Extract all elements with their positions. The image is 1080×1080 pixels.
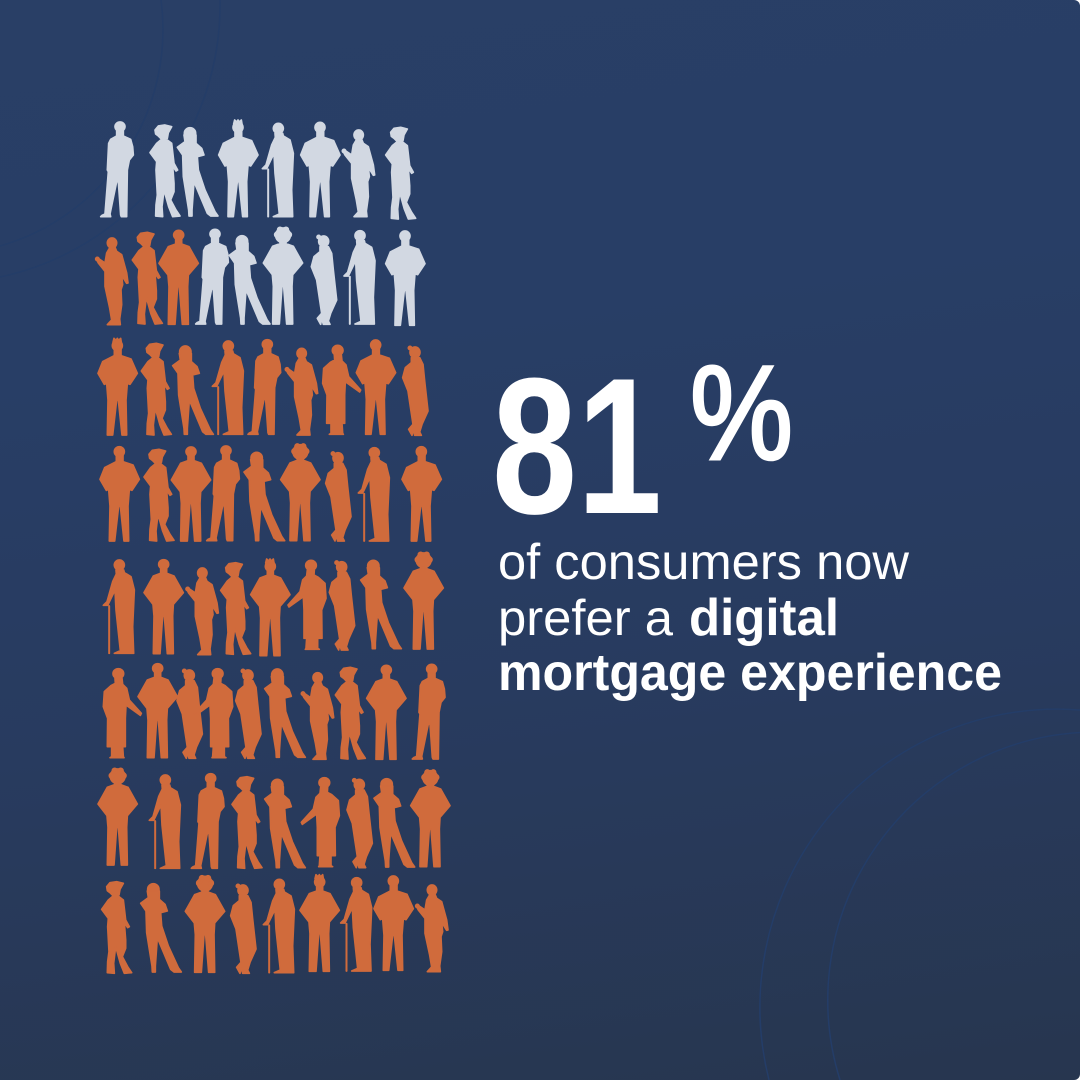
caption text: digital [689,589,839,647]
caption text: prefer a [498,590,673,646]
row 6: orange people [103,664,445,759]
statistic: 81 percent: % [690,339,793,488]
row 3: orange people [98,338,428,435]
row 7: orange people [98,768,450,868]
row 5: orange people [103,552,443,656]
row 1: grey people [101,120,416,219]
decorative arcs bottom right [760,709,1080,1080]
caption text: mortgage experience [498,644,1002,702]
row 2: three orange then grey people [96,227,425,325]
caption text: of consumers now [498,534,910,590]
row 4: orange people [100,444,441,541]
caption text [498,534,1002,702]
pictogram: 81 percent of people highlighted in orange [96,120,450,973]
decorative arcs top left [0,0,220,277]
row 8: orange people [102,875,448,973]
statistic: 81 percent: 81 [492,338,662,555]
